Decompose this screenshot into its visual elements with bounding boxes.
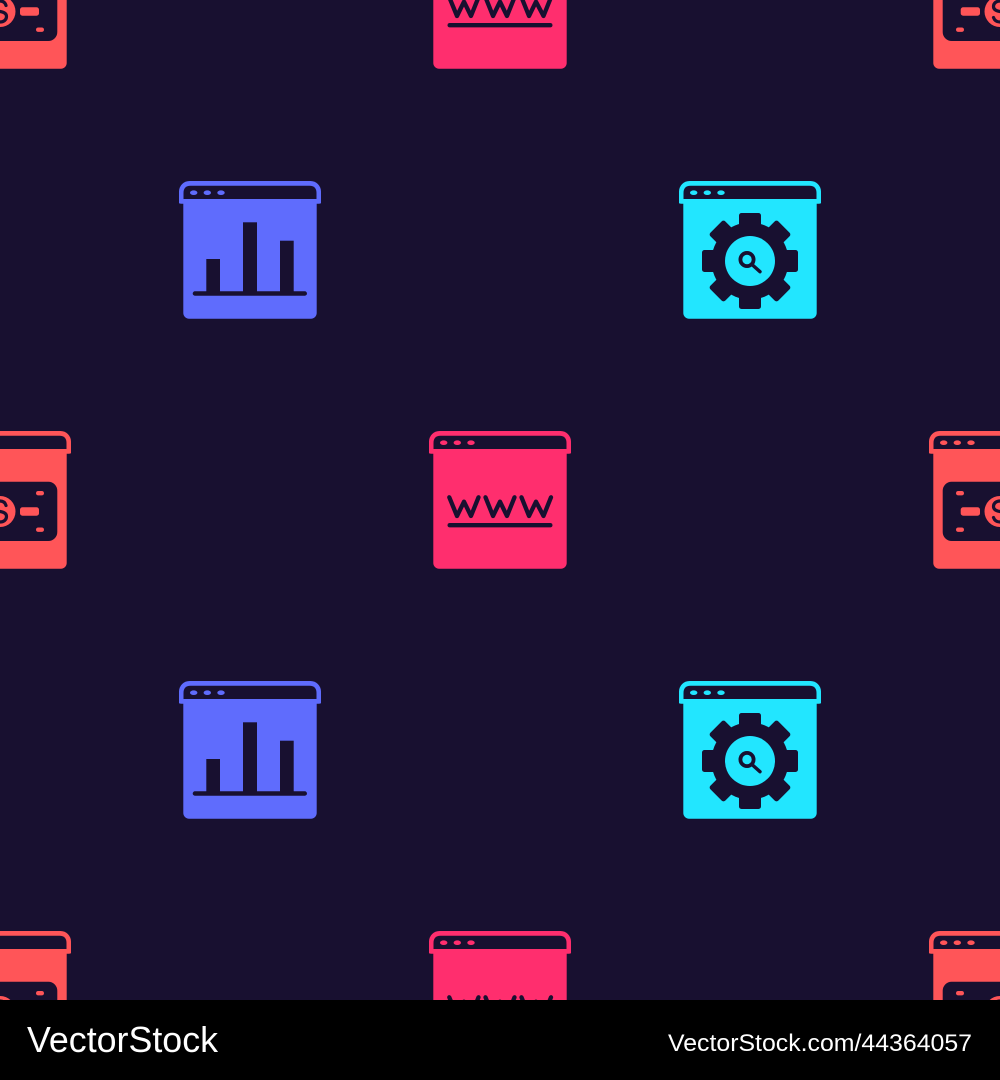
icon: gear search browser lower right — [679, 681, 821, 819]
icon: money browser middle right — [929, 431, 1000, 569]
icon: www browser top — [429, 0, 571, 69]
footer bar — [0, 1000, 1000, 1080]
footer brand name: VectorStock — [27, 1019, 219, 1060]
icon: bar chart browser lower left — [179, 681, 321, 819]
icon: www browser bottom — [429, 931, 571, 1069]
icon: money browser top right — [929, 0, 1000, 69]
icon: www browser centre — [429, 431, 571, 569]
footer image reference: VectorStock.com/44364057 — [668, 1030, 972, 1057]
icon: gear search browser upper right — [679, 181, 821, 319]
icon: money browser middle left — [0, 431, 71, 569]
icon: bar chart browser upper left — [179, 181, 321, 319]
icon: money browser top left — [0, 0, 71, 69]
icon: money browser bottom left — [0, 931, 71, 1069]
icon: money browser bottom right — [929, 931, 1000, 1069]
